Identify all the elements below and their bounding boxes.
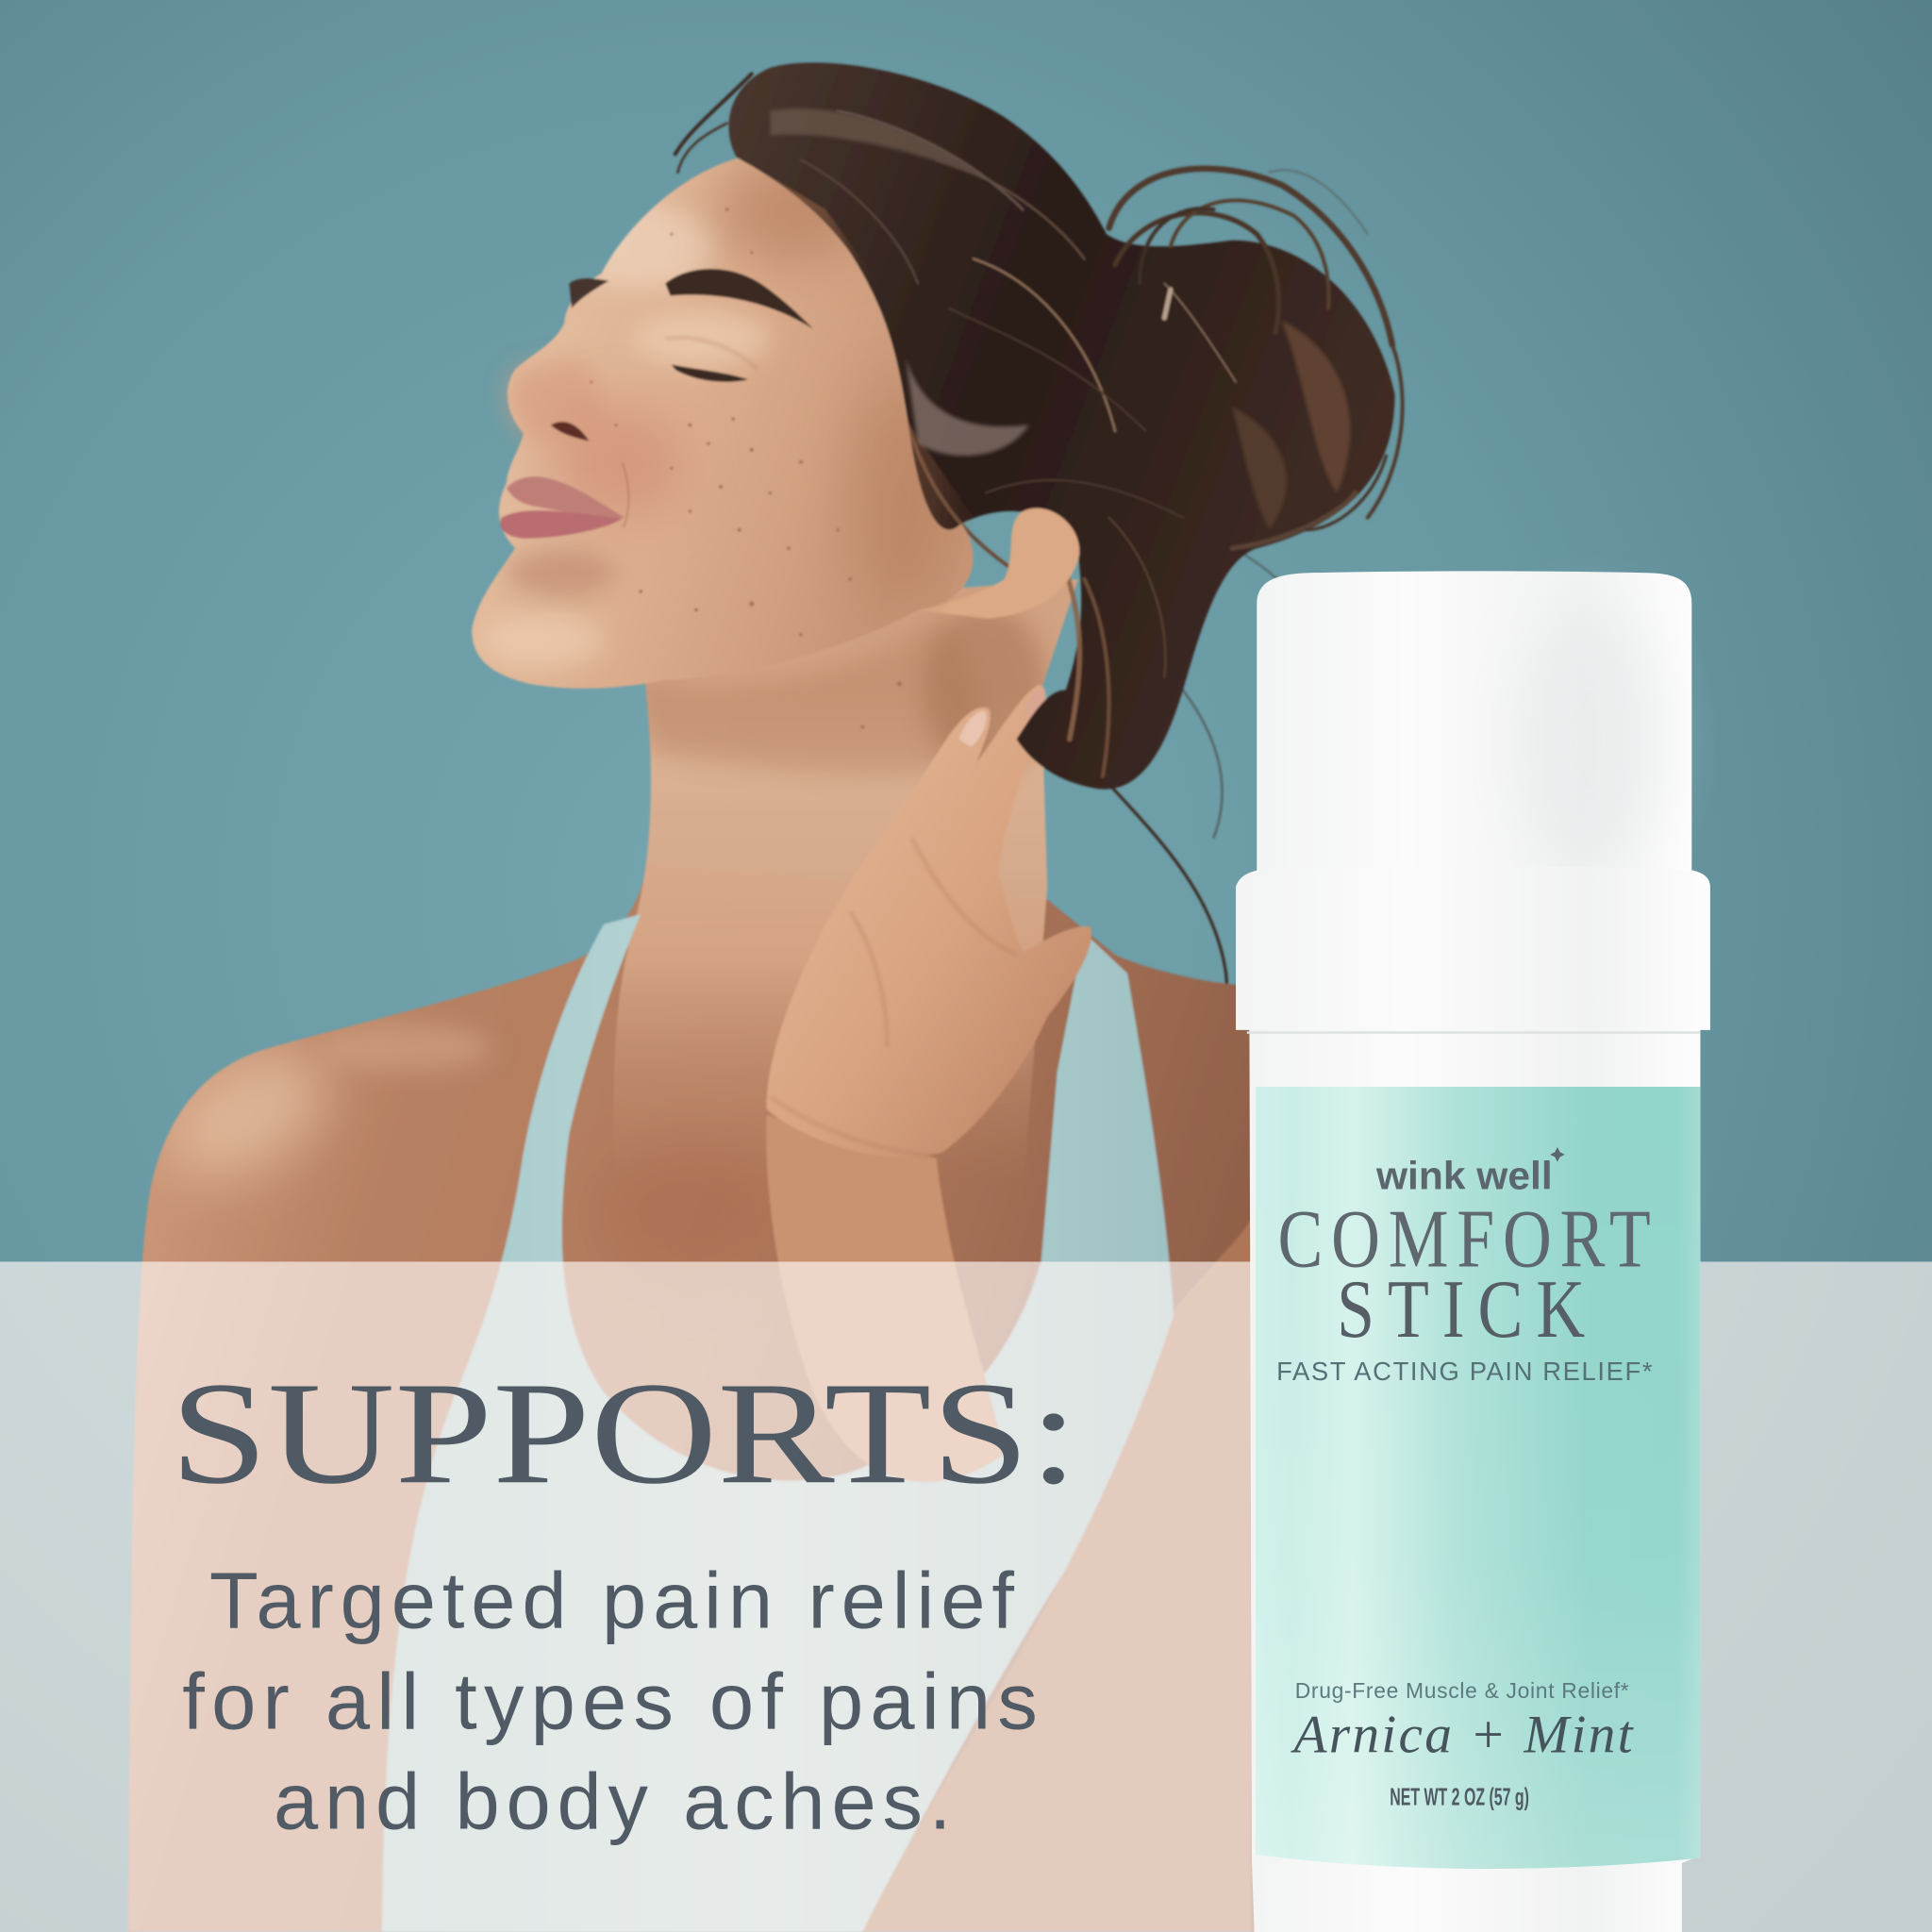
fingernails	[958, 711, 987, 747]
right arm under panel	[862, 1220, 1251, 1932]
brand: wink well: wink well	[1375, 1153, 1553, 1197]
collar edge	[1247, 1032, 1700, 1034]
cap	[1257, 571, 1691, 881]
product: comfort stick	[1236, 571, 1710, 1932]
hand creases	[770, 838, 1017, 1156]
product: comfort stick: STICK	[1337, 1265, 1598, 1356]
hair strands	[675, 74, 1403, 776]
ear	[918, 508, 1079, 619]
body text: benefit statement: and body aches.	[274, 1756, 951, 1845]
hair back and bun	[675, 62, 1403, 790]
tank top	[382, 914, 1174, 1932]
lips	[507, 476, 625, 519]
neck	[614, 579, 1078, 1195]
flavor script: Arnica + Mint	[1290, 1705, 1635, 1764]
grey-brown sheen	[906, 358, 1029, 456]
neck shadow under jaw	[628, 604, 1047, 776]
collar	[1236, 866, 1710, 1030]
body text: benefit statement: for all types of pains	[182, 1656, 1038, 1745]
heading: SUPPORTS:: SUPPORTS:	[170, 1352, 1078, 1514]
eyebrows	[665, 269, 813, 329]
body text: benefit statement: Targeted pain relief	[209, 1555, 1014, 1644]
freckles	[590, 208, 902, 728]
product name: COMFORT	[1277, 1194, 1659, 1285]
stick body	[1249, 1023, 1700, 1932]
net weight: NET WT 2 OZ (57 g)	[1390, 1782, 1529, 1810]
mint label	[1256, 1087, 1700, 1869]
body text: benefit statement	[182, 1555, 1038, 1845]
face shading	[480, 154, 949, 668]
torso and arms	[128, 862, 1257, 1932]
translucent text panel	[0, 1261, 1932, 1932]
left strap and front	[382, 914, 1174, 1932]
hand	[766, 685, 1091, 1158]
forearm	[766, 1115, 1004, 1482]
photo: woman massaging her neck	[128, 62, 1403, 1932]
loose hair behind shoulder	[1091, 555, 1291, 1115]
descriptor: Drug-Free Muscle & Joint Relief*	[1295, 1678, 1629, 1703]
cap shading	[1516, 604, 1663, 874]
body shading	[161, 1019, 758, 1261]
closed eye	[672, 365, 748, 382]
tagline: FAST ACTING PAIN RELIEF*	[1276, 1357, 1653, 1386]
face	[472, 154, 974, 728]
nose	[508, 358, 608, 446]
